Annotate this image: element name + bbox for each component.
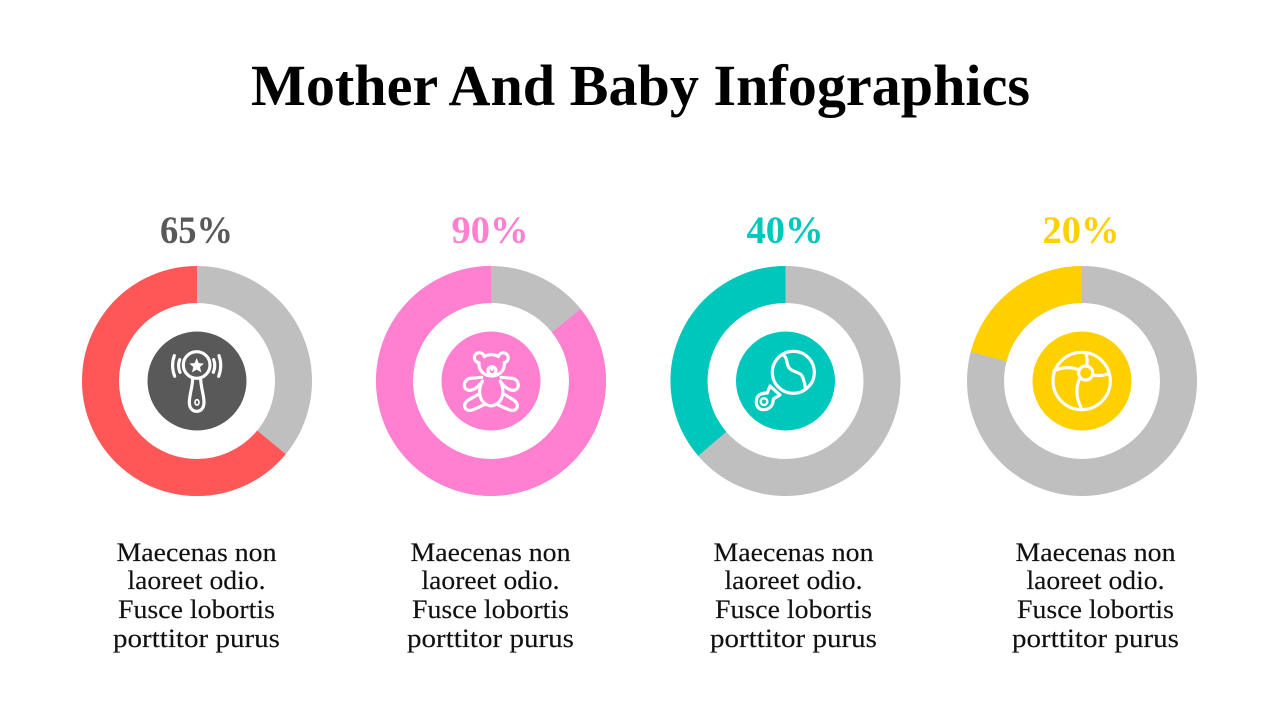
description: laoreet odio. [724, 565, 862, 595]
description: porttitor purus [407, 623, 574, 653]
percentage: 20%: 20% [1042, 209, 1120, 252]
description: Fusce lobortis [715, 594, 872, 624]
description [113, 537, 280, 653]
description [1012, 537, 1179, 653]
description: Maecenas non [1016, 537, 1176, 567]
description: laoreet odio. [128, 565, 266, 595]
description: laoreet odio. [1026, 565, 1164, 595]
description: Maecenas non [116, 537, 276, 567]
description [407, 537, 574, 653]
panel: 40% round rattle [689, 209, 882, 653]
percentage: 40%: 40% [746, 209, 824, 252]
donut chart: 65% [100, 284, 293, 478]
icon: star rattle [148, 332, 246, 430]
icon: teddy bear [442, 332, 540, 430]
description [710, 537, 877, 653]
percentage: 90%: 90% [452, 209, 528, 252]
panel: 65% rattle [100, 209, 293, 653]
description: Maecenas non [410, 537, 570, 567]
description: Fusce lobortis [412, 594, 569, 624]
donut chart: 90% [394, 284, 588, 478]
icon: beach ball [1032, 332, 1132, 430]
description: Fusce lobortis [118, 594, 275, 624]
description: Maecenas non [714, 537, 874, 567]
percentage: 65%: 65% [160, 209, 233, 252]
description: laoreet odio. [422, 565, 560, 595]
description: porttitor purus [113, 623, 280, 653]
donut chart: 20% [986, 284, 1178, 478]
title: Mother And Baby Infographics [251, 53, 1030, 118]
description: porttitor purus [1012, 623, 1179, 653]
panel: 20% ball [986, 209, 1179, 653]
description: Fusce lobortis [1017, 594, 1174, 624]
icon: round rattle [736, 332, 835, 430]
description: porttitor purus [710, 623, 877, 653]
donut chart: 40% [689, 284, 882, 478]
panel: 90% teddy bear [394, 209, 588, 653]
